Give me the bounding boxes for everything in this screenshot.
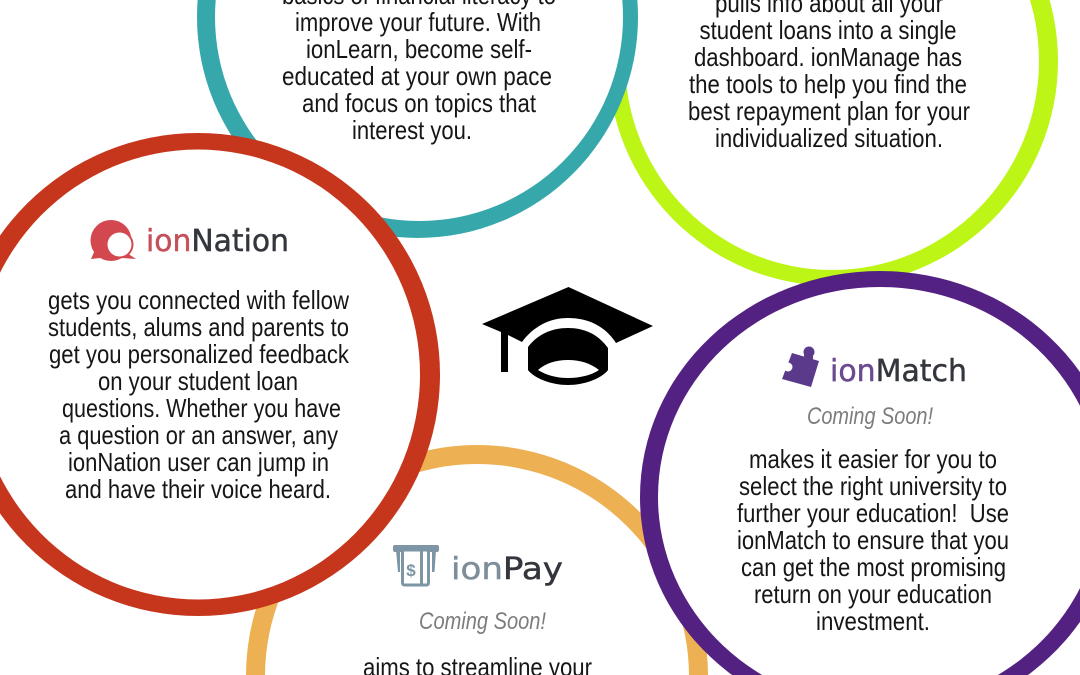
text: ionManage description: individualized situation. [715,123,943,153]
text: ionNation description: a question or an answer, any [59,420,338,450]
text: ionManage description: student loans into a single [700,15,956,45]
logo: ionNation [90,220,289,261]
wordmark: ionPay [451,552,563,587]
text: ionLearn description: interest you. [352,115,472,145]
wordmark: ionMatch [830,354,967,389]
icon: graduation cap [482,287,653,385]
text: ionMatch description [737,444,1009,636]
icon: ATM cash slot: $ [406,561,416,580]
text: ionManage description: best repayment plan for your [688,96,970,126]
logo: ionPay [393,545,563,587]
label: ionPay coming soon: Coming Soon! [419,608,546,635]
icon: puzzle piece [782,346,819,387]
label: ionMatch coming soon: Coming Soon! [807,403,933,430]
text: ionMatch description: ionMatch to ensure that you [737,525,1009,555]
text: ionManage description: the tools to help you find the [689,69,967,99]
text: ionMatch description: further your education! Use [737,498,1009,528]
text: ionNation description: and have their voice heard. [65,474,331,504]
text: ionNation description: on your student loan [98,366,298,396]
ring: ionMatch purple [640,271,1080,675]
text: ionNation description [48,285,350,504]
text: ionMatch description: select the right university to [739,471,1007,501]
text: ionManage description: dashboard. ionManage has [694,42,962,72]
text: ionNation description: get you personalized feedback [49,339,350,369]
text: ionMatch description: can get the most promising [741,552,1006,582]
logo: ionMatch [782,346,967,389]
text: ionLearn description: educated at your own pace [282,61,552,91]
text: ionNation description: questions. Whether you have [62,393,341,423]
text: ionNation description: ionNation user can jump in [68,447,329,477]
text: ionNation description: gets you connected with fellow [48,285,349,315]
text: ionMatch description: investment. [816,606,930,636]
icon: speech bubbles [90,220,136,261]
text: ionMatch description: return on your education [754,579,992,609]
ring: ionLearn teal [197,0,638,238]
text: ionManage description [688,0,970,153]
text: ionLearn description [282,0,556,145]
text: ionNation description: students, alums and parents to [48,312,349,342]
ring: ionManage lime [608,0,1058,286]
text: ionLearn description: improve your future. With [295,7,541,37]
icon: ATM cash slot [393,545,439,585]
text: ionLearn description: ionLearn, become self- [306,34,532,64]
ring: ionNation red [0,133,440,616]
wordmark: ionNation [146,224,289,259]
text: ionMatch description: makes it easier for you to [749,444,997,474]
text: ionLearn description: and focus on topics that [302,88,537,118]
ring: ionPay orange [246,445,708,675]
